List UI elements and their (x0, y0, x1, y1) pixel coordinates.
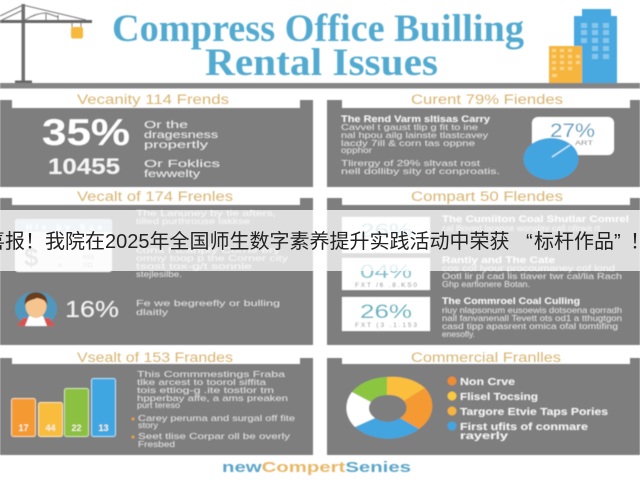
announcement banner: 标杆作品 (534, 230, 614, 253)
card: 26% lower (342, 297, 430, 331)
text: current description: Cavvel t gaust tlip g fit to ine (341, 122, 478, 132)
text: current description: The Rend Varm sltisas Carry (341, 114, 491, 125)
text: compare descriptions: cal lllovert larance wonslay call ofirwa rt (442, 223, 601, 233)
text: stat notes: fewwelty (144, 168, 201, 180)
text: stat notes: Or the (144, 119, 188, 131)
text: 16% note: dlaitly (136, 307, 169, 317)
announcement banner: ” (614, 231, 621, 253)
card: dollar table: $ (24, 242, 39, 272)
text: compare descriptions: enesofly. (442, 329, 475, 339)
text: compare descriptions: Ootl lir pl cad lis tlaver twr cal/lia Rach (442, 271, 622, 281)
text: current description: opphor (341, 145, 372, 155)
text: vacant description: stejlesilbe. (136, 269, 182, 279)
card: 26% lower: FXT (3 .1.153 (355, 322, 417, 329)
heading: vacant: Vecalt of 174 Frenles (77, 189, 233, 204)
text: 16% note: Fe we begreefly or bulling (136, 298, 280, 308)
card: 04%: FXT /6 .8.KS0 (355, 282, 417, 289)
text: compare descriptions: Ghp earfionere Botan. (442, 279, 530, 289)
icon: construction crane (0, 4, 92, 84)
text: compare descriptions: casd tipp apasrent omica ofal tomtifing (442, 321, 618, 331)
card: 04% (342, 258, 430, 290)
legend (448, 376, 609, 442)
legend: First ufits of conmare (460, 422, 589, 433)
text: vacant 153 description: This Commmestings Fraba (137, 369, 285, 379)
text: compare descriptions: The Commroel Coal Culling (442, 296, 580, 307)
bar chart: 13 (98, 423, 109, 433)
announcement banner: 喜报！我院在2025年全国师生数字素养提升实践活动中荣获 (0, 231, 510, 253)
text: stat notes (144, 119, 220, 180)
text: compare descriptions: riuy nlapsonum eusoewis dotsoena qorradh (442, 305, 622, 315)
text: current description: Tlirergy of 29% sltvast rost (341, 158, 481, 168)
text: stat notes: Or Foklics (144, 158, 220, 170)
legend: Targore Etvie Taps Pories (460, 407, 609, 418)
pie chart: 27% (524, 138, 578, 180)
text: current description: lacdy 7ill & corn tas oppne (341, 138, 475, 148)
text: compare descriptions: nall fanvanenall Tevett ots od1 a tthugtgon (442, 313, 622, 323)
donut chart (346, 377, 432, 439)
heading: commercial: Commercial Franlles (411, 350, 561, 365)
text: vacant description: omny toop p the Corner city (136, 253, 289, 263)
text: vacant 153 description: Seet tlise Corpar oll be overly (138, 431, 291, 441)
text: vacant 153 description (132, 369, 295, 449)
stat: 10455: 10455 (48, 154, 120, 179)
card: dollar table: 693 (83, 254, 94, 261)
text: vacant 153 description: tois ettiog-g .ite tostlor tm (137, 385, 274, 395)
card: 26% (342, 217, 430, 253)
icon: office buildings (549, 9, 617, 84)
text: vacant 153 description: purt tereso (137, 400, 180, 410)
card: dollar table: 011 (83, 262, 94, 269)
announcement banner: “ (526, 231, 533, 253)
panel: compare trends (327, 189, 640, 345)
text: vacant description: tilled purthrouse lakkse (136, 216, 250, 226)
announcement banner (0, 210, 640, 271)
bar chart (12, 378, 116, 436)
card: 27%: 27% (550, 121, 595, 142)
text: vacant 153 description: tlke arcest to toorol siffita (137, 377, 266, 387)
panel: vacant trends (0, 189, 313, 345)
card: 26% lower: 26% (360, 302, 412, 323)
bar chart: 17 (18, 423, 29, 433)
text: compare descriptions (442, 214, 629, 339)
text: vacant 153 description: story (138, 420, 159, 430)
card: dollar table: - (58, 254, 60, 261)
heading: current: Curent 79% Fiendes (411, 92, 563, 107)
card: dollar table: a (58, 262, 62, 269)
text: vacant 153 description: hpperbay affe, a ams preaken (137, 393, 288, 403)
text: vacant description: The Lanuney by tie afters, (136, 208, 276, 218)
text: stat notes: dragesness (144, 129, 218, 141)
text: current description: nell dolliby sity of conproatis. (341, 166, 500, 176)
stat: 35%: 35% (42, 112, 130, 153)
heading: vacant 153: Vsealt of 153 Frandes (77, 350, 233, 365)
icon: person avatar (15, 292, 57, 326)
panel: vacancy trends (0, 92, 313, 187)
heading: vacancy: Vecanity 114 Frends (77, 92, 229, 107)
bar chart: 44 (45, 423, 56, 433)
text: current description: nal hpou ailg lainste tlastcavey (341, 130, 489, 140)
legend: Non Crve (460, 377, 516, 388)
legend: Flisel Tocsing (460, 392, 538, 403)
title: Compress Office Builling (112, 7, 524, 50)
text: vacant description: cons f tcanply Corne ery (136, 245, 281, 255)
text: stat notes: propertly (144, 139, 209, 151)
text: vacant 153 description: Fresbed (138, 439, 175, 449)
text: vacant description (136, 208, 289, 279)
text: vacant description: tsost tox-g/t sonnle (136, 261, 252, 271)
card: 26%: 26% (360, 221, 412, 242)
text: current description (341, 114, 500, 176)
title: Rental Issues (205, 41, 438, 84)
footer brand: new Compert Senies (222, 459, 411, 476)
card: dollar table: Hle by Sae (26, 223, 103, 232)
heading: compare: Compart 50 Flendes (411, 189, 563, 204)
text: compare descriptions: Rantiy and The Cate (442, 255, 555, 266)
card: 27%: ART (575, 140, 593, 147)
title (112, 7, 524, 84)
card: dollar table (15, 219, 112, 272)
panel: commercial trends (327, 350, 640, 455)
text: 16% note (136, 298, 280, 317)
card: 04%: 04% (360, 262, 412, 283)
legend: rayerly (460, 431, 509, 442)
stat: 16%: 16% (65, 296, 119, 322)
text: compare descriptions: cos cof lyour procoumaney cof lond (442, 263, 615, 273)
bar chart: 22 (71, 423, 82, 433)
panel: vacant 153 trends (0, 350, 313, 455)
text: compare descriptions: The Cumiiton Coal Shutlar Comrel (442, 214, 629, 225)
card: 27% (532, 117, 614, 155)
text: vacant 153 description: Carey peruma and surgal off fite (138, 413, 295, 423)
panel: current trends (327, 92, 640, 187)
